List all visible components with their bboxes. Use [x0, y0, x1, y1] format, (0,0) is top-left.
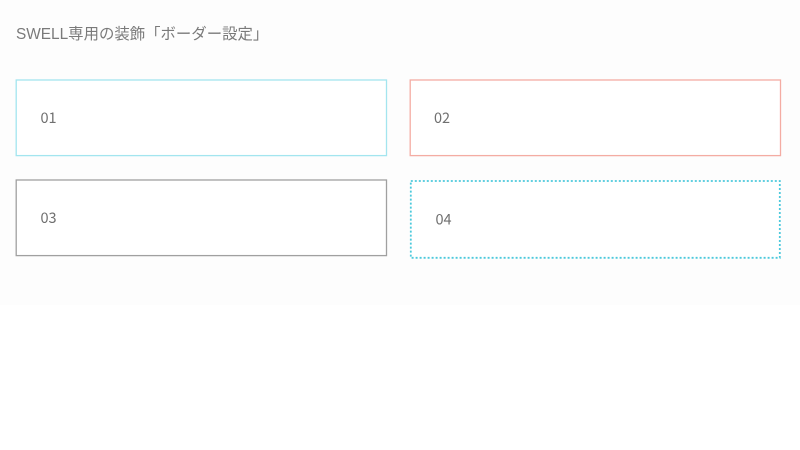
red frame 02: [410, 80, 780, 156]
panel: border sample 01: [16, 80, 386, 156]
panel: border sample 04: [411, 181, 780, 258]
panel: border sample 02: [410, 80, 780, 156]
panel: border sample 03: [16, 180, 386, 256]
cyan frame 01: [16, 80, 386, 156]
dotted frame 04: [411, 181, 780, 258]
label: 03: 03: [40, 207, 57, 228]
label: 01: 01: [40, 107, 57, 128]
background panel: [0, 0, 800, 305]
grey frame 03: [16, 180, 386, 256]
title: SWELL専用の装飾「ボーダー設定」: [16, 26, 268, 42]
label: 02: 02: [434, 107, 450, 128]
label: 04: 04: [436, 208, 452, 230]
